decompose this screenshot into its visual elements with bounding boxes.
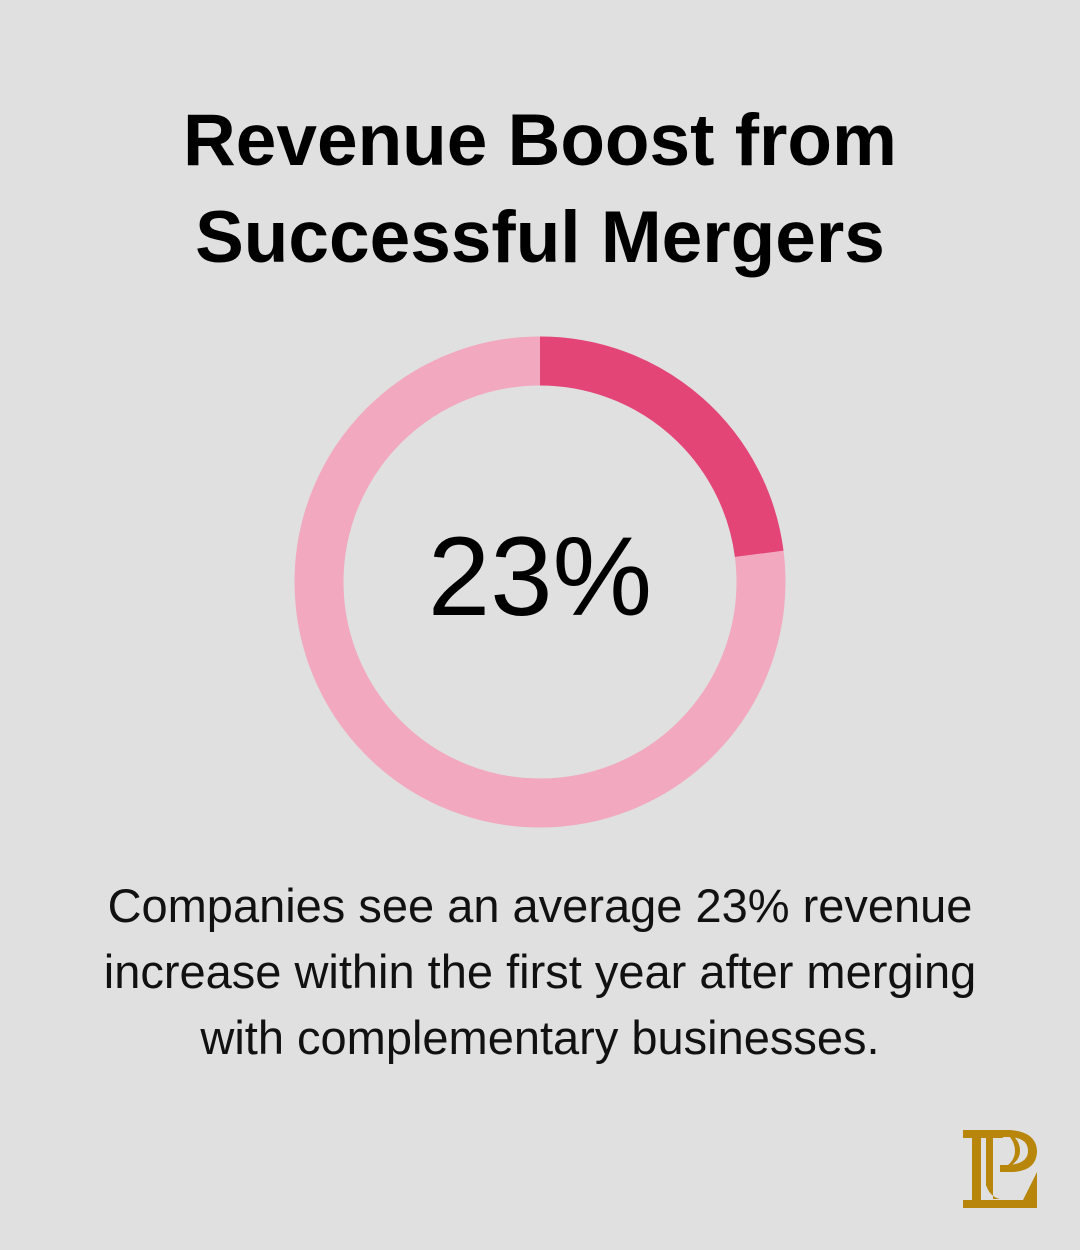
center value: 23% xyxy=(428,514,652,639)
icon: logo xyxy=(963,1130,1037,1208)
title xyxy=(183,100,897,278)
description text: with complementary businesses. xyxy=(200,1011,880,1064)
title: Revenue Boost from xyxy=(183,100,897,181)
description text: Companies see an average 23% revenue xyxy=(108,879,972,932)
description text: increase within the first year after merging xyxy=(104,945,976,998)
description text xyxy=(104,879,976,1064)
title: Successful Mergers xyxy=(195,197,885,278)
